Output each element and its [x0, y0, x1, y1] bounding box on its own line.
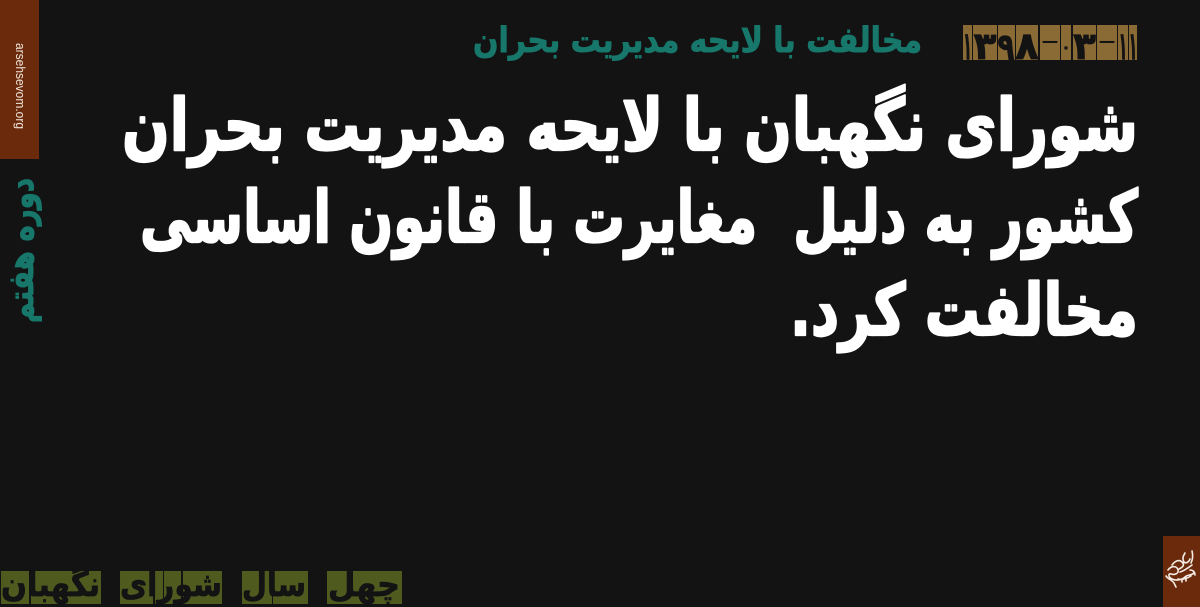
date digits — [964, 24, 1137, 69]
series title: شورای — [120, 565, 222, 605]
subject heading: مخالفت با لایحه مدیریت بحران — [473, 21, 922, 61]
date digits: ۳ — [1073, 24, 1096, 68]
date digits: ۰ — [1060, 37, 1072, 58]
date digits: ۱ — [964, 24, 972, 68]
date stamp — [963, 24, 1137, 69]
date digits: ۸ — [1015, 24, 1039, 68]
series title: سال — [242, 565, 306, 605]
date digits: ۳ — [974, 24, 996, 68]
website address: arsehsevom.org — [13, 43, 28, 129]
main statement — [122, 83, 1138, 353]
series title: نگهبان — [1, 565, 100, 605]
date digits: - — [1040, 34, 1061, 50]
panel: logo tab — [1163, 536, 1200, 607]
panel: website tab — [0, 0, 39, 159]
date digits: ۱ — [1119, 24, 1127, 68]
text: ۱ — [1129, 24, 1137, 68]
date digits: - — [1097, 34, 1118, 50]
icon: calligraphic logo — [1166, 551, 1195, 587]
series title: چهل — [328, 565, 400, 605]
series stamp — [1, 565, 402, 605]
date digits: ۹ — [998, 25, 1014, 69]
series title — [1, 565, 400, 605]
period label: دوره هفتم — [2, 178, 42, 323]
